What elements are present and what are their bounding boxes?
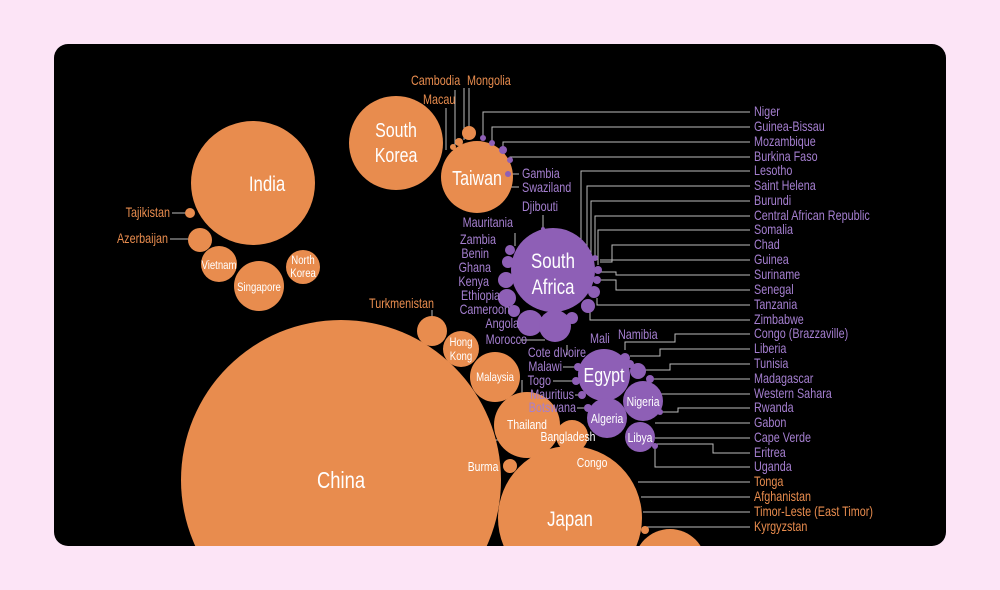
purple side labels: Madagascar xyxy=(754,371,813,386)
bubble labels: Algeria xyxy=(591,412,624,426)
purple side labels: Liberia xyxy=(754,341,787,356)
orange side labels: Mongolia xyxy=(467,73,511,88)
bubble labels: Korea xyxy=(375,144,418,166)
purple side labels: Saint Helena xyxy=(754,178,816,193)
purple side labels: Mali xyxy=(590,331,610,346)
purple side labels: Suriname xyxy=(754,267,800,282)
purple side labels: Cote dIvoire xyxy=(528,345,586,360)
bubble labels: Vietnam xyxy=(201,259,237,272)
purple side labels: Gambia xyxy=(522,166,560,181)
purple side labels: Morocco xyxy=(486,332,527,347)
purple side labels: Central African Republic xyxy=(754,208,870,223)
orange side labels: Macau xyxy=(423,92,455,107)
purple side labels: Tanzania xyxy=(754,297,797,312)
orange side labels xyxy=(117,73,873,534)
bubble labels: South xyxy=(375,119,417,141)
purple side labels: Burkina Faso xyxy=(754,149,818,164)
purple side labels: Burundi xyxy=(754,193,791,208)
purple side labels: Djibouti xyxy=(522,199,558,214)
purple side labels: Eritrea xyxy=(754,445,786,460)
bubble labels: North xyxy=(291,254,315,267)
bubbles: orange Asia xyxy=(181,96,706,590)
bubble labels: Malaysia xyxy=(476,371,515,384)
purple side labels: Guinea-Bissau xyxy=(754,119,825,134)
orange side labels: Timor-Leste (East Timor) xyxy=(754,504,873,519)
orange side labels: Tajikistan xyxy=(126,205,170,220)
purple side labels: Angola xyxy=(485,316,519,331)
bubble labels: Libya xyxy=(628,431,653,445)
bubble labels: Japan xyxy=(547,508,593,532)
purple side labels: Ethiopia xyxy=(461,288,500,303)
purple side labels: Western Sahara xyxy=(754,386,832,401)
purple side labels: Guinea xyxy=(754,252,789,267)
orange side labels: Tonga xyxy=(754,474,784,489)
bubble labels: Nigeria xyxy=(627,395,660,409)
purple side labels: Lesotho xyxy=(754,163,793,178)
purple side labels: Botswana xyxy=(529,400,576,415)
purple side labels: Senegal xyxy=(754,282,794,297)
bubble labels: South xyxy=(531,250,575,274)
bubbles: purple Africa xyxy=(480,135,663,452)
purple side labels: Kenya xyxy=(458,274,489,289)
purple side labels: Chad xyxy=(754,237,780,252)
orange side labels: Cambodia xyxy=(411,73,460,88)
bubble labels: Taiwan xyxy=(452,167,502,189)
bubble labels: Africa xyxy=(532,276,575,300)
purple side labels: Namibia xyxy=(618,327,658,342)
purple side labels: Mauritius xyxy=(530,387,574,402)
purple side labels: Congo (Brazzaville) xyxy=(754,326,848,341)
bubble labels: Hong xyxy=(450,336,472,349)
bubble labels: China xyxy=(317,468,365,494)
bubble labels: Thailand xyxy=(507,418,547,432)
bubble labels: Egypt xyxy=(584,364,624,386)
purple side labels: Togo xyxy=(528,373,551,388)
bubble labels: Singapore xyxy=(237,281,281,294)
purple side labels: Gabon xyxy=(754,415,786,430)
purple side labels xyxy=(458,104,870,474)
purple side labels: Niger xyxy=(754,104,780,119)
purple side labels: Zimbabwe xyxy=(754,312,804,327)
purple side labels: Benin xyxy=(461,246,489,261)
purple side labels: Cape Verde xyxy=(754,430,811,445)
purple side labels: Mozambique xyxy=(754,134,816,149)
purple side labels: Ghana xyxy=(459,260,491,275)
bubble labels: Korea xyxy=(290,267,317,280)
connector lines xyxy=(170,88,750,527)
bubble labels: India xyxy=(249,173,286,197)
purple side labels: Cameroon xyxy=(460,302,510,317)
bubble labels: Bangladesh xyxy=(541,430,595,444)
purple side labels: Mauritania xyxy=(463,215,513,230)
purple side labels: Rwanda xyxy=(754,400,794,415)
purple side labels: Somalia xyxy=(754,222,793,237)
orange side labels: Kyrgyzstan xyxy=(754,519,807,534)
panel: black background xyxy=(54,44,946,546)
purple side labels: Swaziland xyxy=(522,180,571,195)
bubble labels: Congo xyxy=(577,456,608,470)
bubble labels: Kong xyxy=(450,350,472,363)
purple side labels: Tunisia xyxy=(754,356,789,371)
bubble labels xyxy=(201,119,660,532)
bubble labels: Burma xyxy=(468,460,499,474)
orange side labels: Azerbaijan xyxy=(117,231,168,246)
orange side labels: Afghanistan xyxy=(754,489,811,504)
orange side labels: Turkmenistan xyxy=(369,296,434,311)
purple side labels: Zambia xyxy=(460,232,496,247)
purple side labels: Malawi xyxy=(528,359,562,374)
purple side labels: Uganda xyxy=(754,459,792,474)
